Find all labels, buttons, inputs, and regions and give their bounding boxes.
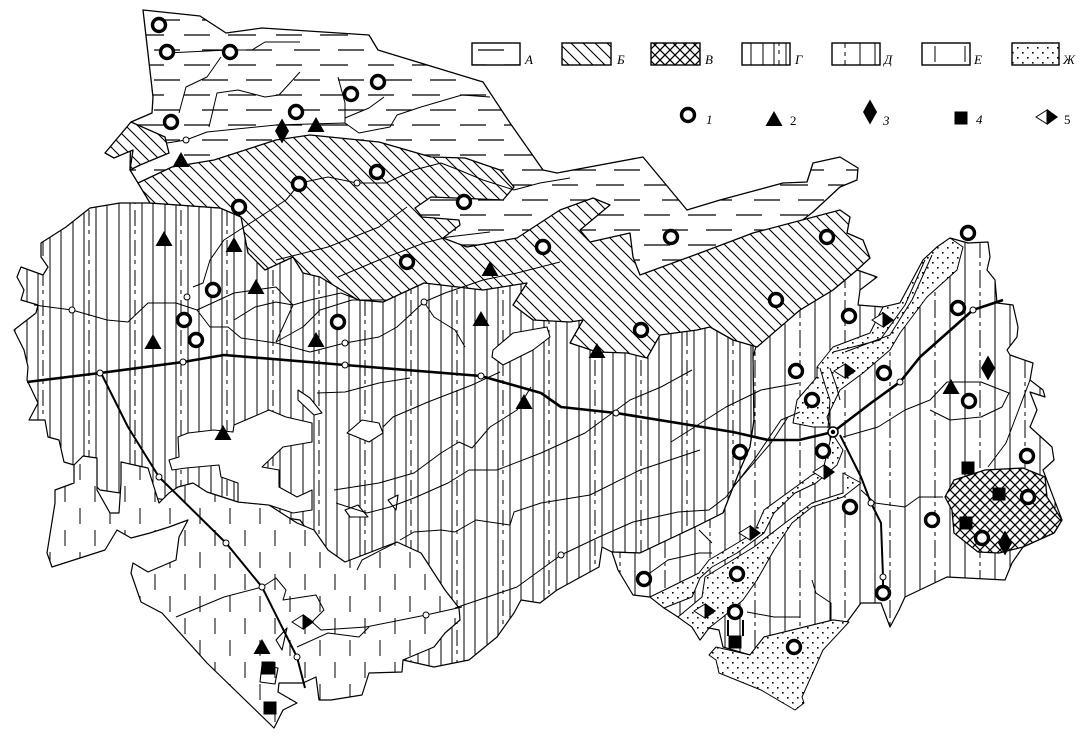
legend: zones: Б [616, 52, 625, 67]
markers 5: half diamonds [292, 312, 894, 630]
legend: symbols: 2 [790, 113, 796, 128]
railway [27, 300, 1003, 688]
markers 4: squares [262, 462, 1006, 714]
legend: zones: Е [973, 52, 982, 67]
legend: zones [472, 43, 1076, 67]
legend: zones: Д [882, 52, 893, 67]
lakes [169, 327, 550, 684]
markers 1: circles [152, 18, 1034, 654]
rivers [34, 42, 1030, 647]
region A: northern zone [130, 10, 858, 300]
legend: symbols: 3 [882, 113, 890, 128]
stations: small white circles [69, 137, 976, 660]
legend: zones: Г [794, 52, 803, 67]
region B: diagonal hatched band [105, 122, 870, 358]
legend: symbols: 5 [1064, 112, 1070, 127]
region V: cross hatched massif [945, 468, 1062, 553]
legend: zones: Ж [1062, 52, 1076, 67]
markers 3: diamonds [275, 118, 1012, 556]
legend: zones: В [705, 52, 713, 67]
region E: southwestern sparse steppe zone [47, 456, 460, 728]
markers 2: triangles [144, 117, 960, 654]
legend: zones: А [524, 52, 533, 67]
region G: western vertical hatched zone [14, 203, 754, 667]
legend: symbols [682, 100, 1070, 128]
region Zh: stippled river valleys [650, 238, 963, 710]
region D: eastern vertical hatched zone [612, 238, 1062, 655]
legend: symbols: 1 [706, 112, 712, 127]
legend: symbols: 4 [976, 112, 983, 127]
